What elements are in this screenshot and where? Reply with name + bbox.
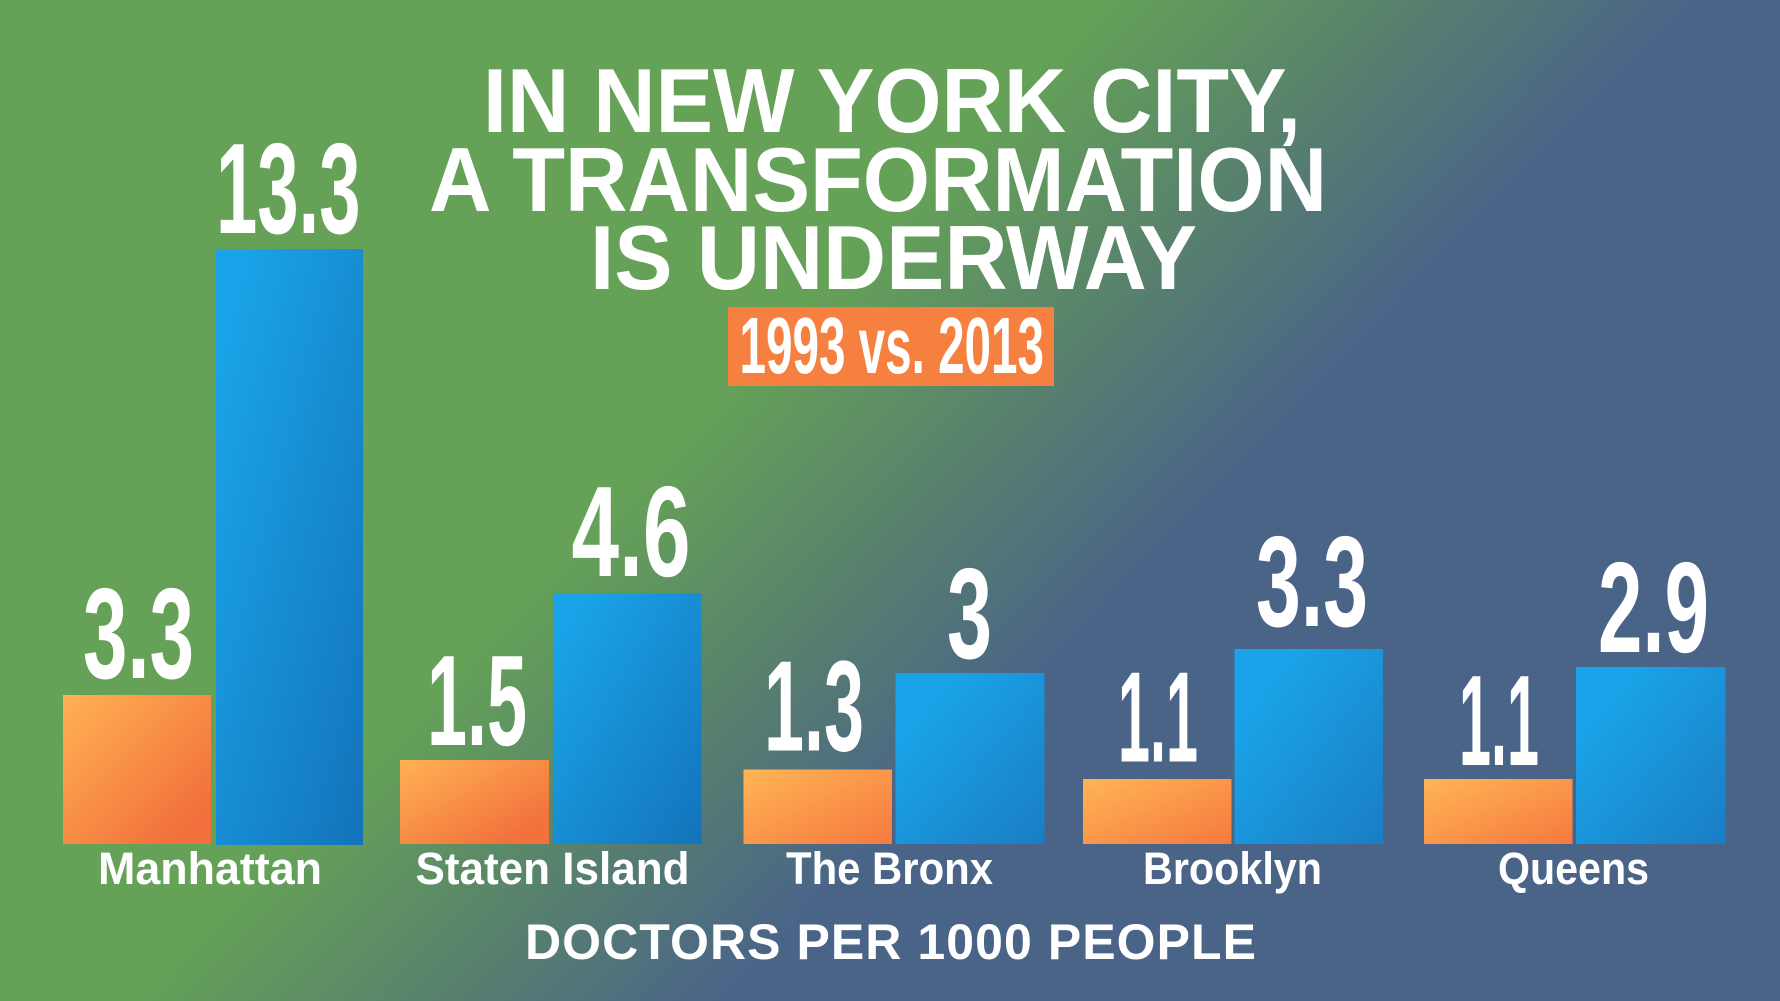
bar: Staten Island 1993 — [400, 760, 549, 844]
bar: Manhattan 2013 — [216, 249, 363, 845]
value: Staten Island 1993: 1.5 — [427, 629, 527, 773]
value: Staten Island 2013: 4.6 — [572, 460, 690, 604]
bar: Staten Island 2013 — [553, 593, 702, 844]
label: The Bronx: The Bronx — [786, 843, 993, 894]
value: Brooklyn 2013: 3.3 — [1256, 510, 1368, 654]
bar: Brooklyn 1993 — [1083, 779, 1232, 844]
bar: Manhattan 1993 — [63, 695, 211, 844]
value: The Bronx 2013: 3 — [947, 542, 992, 686]
axis caption: DOCTORS PER 1000 PEOPLE — [525, 914, 1256, 970]
bar: The Bronx 1993 — [744, 770, 892, 844]
title — [429, 51, 1327, 309]
title: A TRANSFORMATION — [429, 130, 1327, 231]
title: IN NEW YORK CITY, — [483, 51, 1301, 152]
label: Staten Island: Staten Island — [416, 843, 690, 894]
bar: Queens 1993 — [1424, 779, 1572, 844]
bar group: Staten Island — [400, 460, 702, 894]
bar group: Manhattan — [63, 117, 363, 894]
bar: Brooklyn 2013 — [1234, 649, 1383, 844]
bar group: Brooklyn — [1083, 510, 1383, 894]
value: The Bronx 1993: 1.3 — [764, 634, 864, 778]
bar group: The Bronx — [744, 542, 1044, 894]
title: IS UNDERWAY — [590, 208, 1197, 309]
label: Queens: Queens — [1498, 843, 1649, 894]
date tag: 1993 vs. 2013 — [728, 301, 1054, 390]
bar group: Queens — [1424, 536, 1726, 894]
label: Manhattan: Manhattan — [98, 843, 322, 894]
bar: The Bronx 2013 — [896, 673, 1044, 844]
value: Queens 2013: 2.9 — [1598, 536, 1709, 680]
bar: Queens 2013 — [1576, 667, 1726, 844]
value: Manhattan 1993: 3.3 — [83, 562, 194, 706]
date tag: 1993 vs. 2013: 1993 vs. 2013 — [740, 301, 1044, 390]
bar group: Queens: 1.1 — [1459, 649, 1539, 793]
value: Manhattan 2013: 13.3 — [216, 117, 360, 261]
bar group: Brooklyn: 1.1 — [1118, 646, 1198, 790]
label: Brooklyn: Brooklyn — [1143, 843, 1322, 894]
